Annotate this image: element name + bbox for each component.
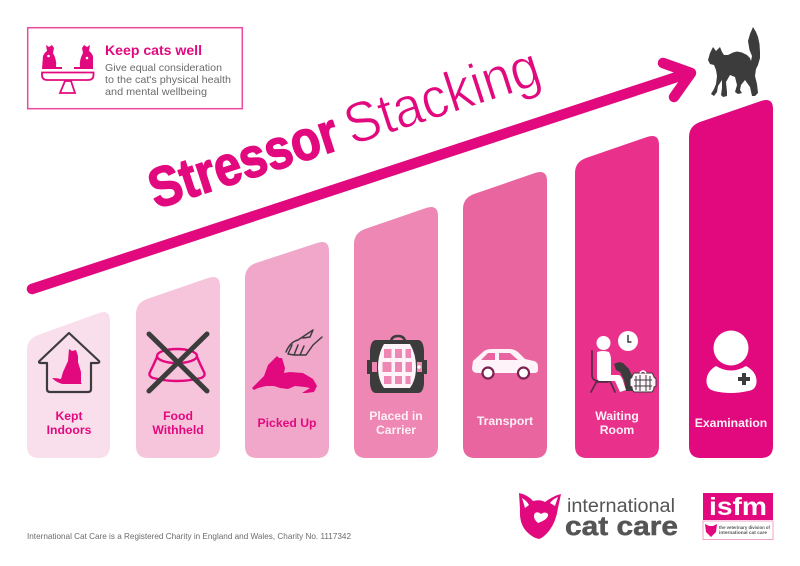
icon: car bbox=[472, 349, 538, 378]
icon: arched black cat bbox=[708, 27, 760, 97]
callout body text: Give equal consideration bbox=[105, 62, 222, 74]
label: Waiting bbox=[595, 409, 639, 423]
bar: picked up bbox=[245, 242, 329, 458]
label: Indoors bbox=[47, 423, 92, 437]
callout heading: Keep cats well bbox=[105, 43, 202, 58]
icon: cat in house bbox=[39, 333, 99, 392]
isfm tagline: the veterinary division of bbox=[719, 525, 771, 530]
icon: cats balanced on scales bbox=[42, 45, 94, 93]
title: Stressor bbox=[140, 100, 346, 220]
icon: pet carrier bbox=[367, 336, 427, 393]
icon: hand over lying cat bbox=[252, 330, 322, 393]
label: Room bbox=[600, 423, 634, 437]
icon: person waiting with dog and carrier bbox=[591, 331, 656, 392]
label: Transport bbox=[477, 414, 533, 428]
logo wordmark bbox=[565, 496, 678, 541]
label: Food bbox=[163, 409, 193, 423]
icon: cat heart logo bbox=[519, 493, 561, 539]
bar: food withheld bbox=[136, 277, 220, 458]
label: Carrier bbox=[376, 423, 416, 437]
logo: international cat care bbox=[519, 493, 678, 541]
isfm tagline: international cat care bbox=[719, 530, 768, 535]
callout body text: and mental wellbeing bbox=[105, 86, 207, 98]
bar: transport bbox=[463, 172, 547, 458]
callout body text: to the cat's physical health bbox=[105, 74, 231, 86]
bar: placed in carrier bbox=[354, 207, 438, 458]
title bbox=[140, 34, 548, 221]
isfm tagline bbox=[719, 525, 771, 535]
icon: veterinarian bbox=[706, 330, 757, 393]
bar: examination bbox=[689, 100, 773, 458]
logo wordmark: cat care bbox=[565, 511, 678, 541]
bar: kept indoors bbox=[27, 312, 110, 458]
callout: keep cats well bbox=[28, 28, 242, 109]
title: Stacking bbox=[336, 34, 548, 158]
small heart bbox=[705, 524, 717, 537]
logo wordmark: international bbox=[567, 496, 675, 517]
logo: isfm bbox=[703, 493, 773, 540]
arrow bbox=[32, 63, 691, 289]
isfm letters: isfm bbox=[709, 493, 767, 521]
label: Withheld bbox=[152, 423, 204, 437]
bar: waiting room bbox=[575, 136, 659, 458]
icon: crossed-out bowl bbox=[149, 334, 207, 391]
label: Placed in bbox=[369, 409, 423, 423]
callout body text bbox=[105, 62, 231, 98]
label: Picked Up bbox=[258, 416, 316, 430]
footer charity note: International Cat Care is a Registered Charity in England and Wales, Charity No. 1117342 bbox=[27, 531, 351, 541]
label: Examination bbox=[695, 416, 767, 430]
label: Kept bbox=[55, 409, 83, 423]
